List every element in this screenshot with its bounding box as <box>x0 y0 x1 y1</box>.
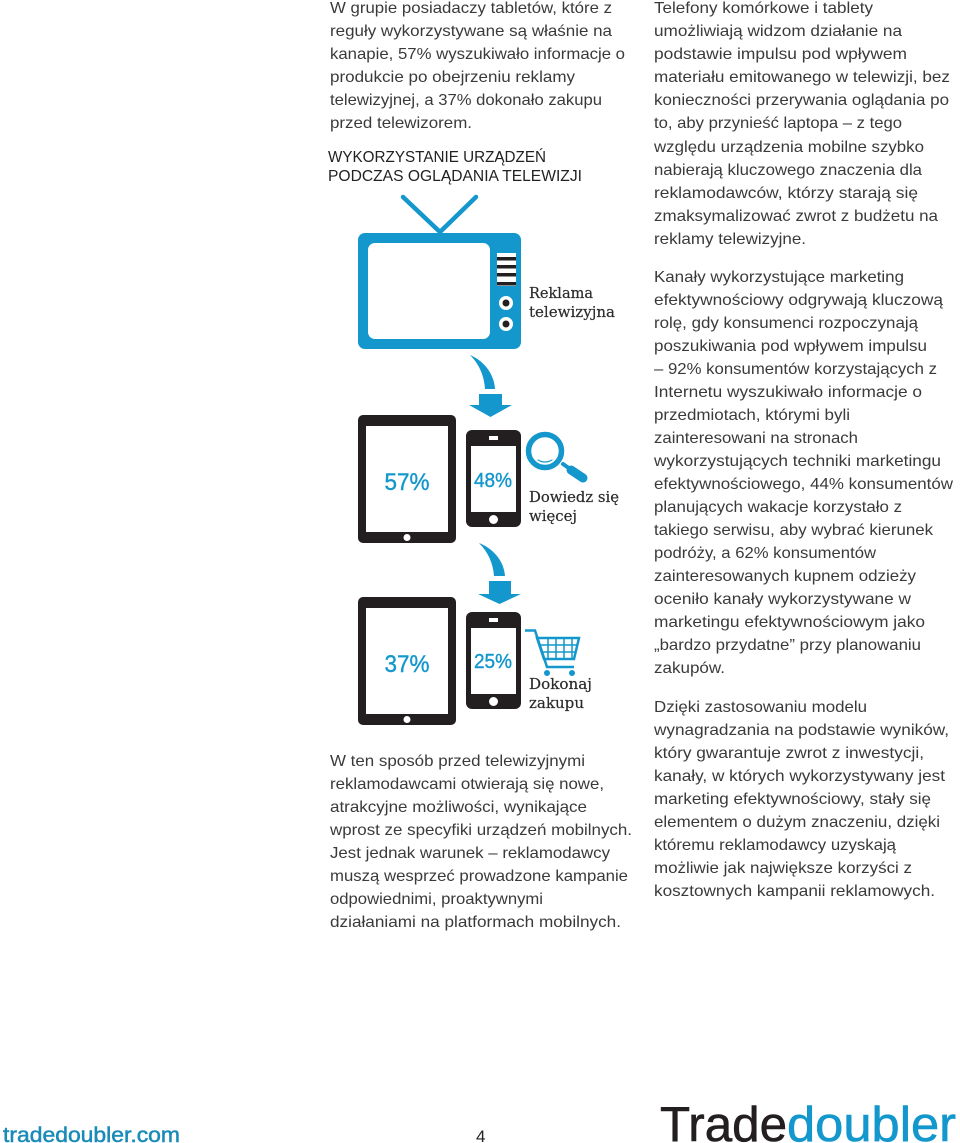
text block: tablet owners intro: W grupie posiadaczy tabletów, które z <box>330 0 612 17</box>
text block: performance marketing channels: oceniło kanały wykorzystywane w <box>654 591 911 608</box>
text block: opportunities for advertisers: reklamodawcami otwierają się nowe, <box>330 776 604 793</box>
text block: performance marketing channels: zainteresowani na stronach <box>654 430 858 447</box>
text block: performance marketing channels: podróży, a 62% konsumentów <box>654 545 876 562</box>
text block: tablet owners intro: produkcie po obejrzeniu reklamy <box>330 69 575 86</box>
text block: performance-based payment model: marketing efektywnościowy, stały się <box>654 791 931 808</box>
icon: shopping cart <box>525 630 579 676</box>
text block: performance marketing channels: rolę, gdy konsumenci rozpoczynają <box>654 315 918 332</box>
label: TV advertising <box>529 284 615 321</box>
text block: performance-based payment model: kosztownych kampanii reklamowych. <box>654 883 935 900</box>
icon: phone 25%: 25% <box>474 651 512 673</box>
icon: tablet 37% <box>358 597 456 725</box>
text block: performance marketing channels: Kanały wykorzystujące marketing <box>654 269 904 286</box>
text block: opportunities for advertisers: atrakcyjne możliwości, wynikające <box>330 799 587 816</box>
icon: television <box>358 197 521 349</box>
text block: phones and tablets impulse <box>653 0 950 248</box>
text block: performance marketing channels: zakupów. <box>654 660 725 677</box>
text block: performance marketing channels: poszukiwania pod wpływem impulsu <box>654 338 927 355</box>
arrow: research to purchase <box>478 543 521 604</box>
text block: performance marketing channels <box>653 269 953 677</box>
text block: opportunities for advertisers: W ten sposób przed telewizyjnymi <box>330 753 585 770</box>
heading: device usage while watching TV: PODCZAS OGLĄDANIA TELEWIZJI <box>328 168 582 185</box>
text block: phones and tablets impulse: zmaksymalizować zwrot z budżetu na <box>654 208 938 225</box>
text block: performance-based payment model: któremu reklamodawcy uzyskają <box>654 837 896 854</box>
text block: phones and tablets impulse: umożliwiają widzom działanie na <box>654 23 902 40</box>
text block: performance marketing channels: wykorzystujących techniki marketingu <box>653 453 941 470</box>
label: make a purchase <box>529 675 592 712</box>
text block: phones and tablets impulse: konieczności przerywania oglądania po <box>654 92 949 109</box>
text block: tablet owners intro: przed telewizorem. <box>330 115 472 132</box>
icon: phone 48% <box>466 430 521 527</box>
text block: performance marketing channels: planujących wakacje korzystało z <box>654 499 902 516</box>
icon: tablet 57%: 57% <box>384 469 430 496</box>
text block: performance marketing channels: zainteresowanych kupnem odzieży <box>654 568 916 585</box>
label: make a purchase: zakupu <box>529 694 584 712</box>
text block: performance marketing channels: takiego serwisu, aby wybrać kierunek <box>654 522 934 539</box>
text block: opportunities for advertisers: muszą wesprzeć prowadzone kampanie <box>330 868 628 885</box>
icon: tablet 37%: 37% <box>384 651 430 678</box>
text block: opportunities for advertisers <box>329 753 632 931</box>
text block: phones and tablets impulse: reklamodawców, którzy starają się <box>654 185 918 202</box>
text block: performance marketing channels: „bardzo przydatne” przy planowaniu <box>654 637 921 654</box>
label: TV advertising: telewizyjna <box>529 303 615 321</box>
icon: phone 48%: 48% <box>474 470 512 492</box>
text block: tablet owners intro <box>330 0 625 132</box>
text block: opportunities for advertisers: odpowiednimi, proaktywnymi <box>330 891 543 908</box>
text block: tablet owners intro: kanapie, 57% wyszukiwało informacje o <box>330 46 625 63</box>
text block: performance marketing channels: efektywnościowego, 44% konsumentów <box>654 476 953 493</box>
text block: opportunities for advertisers: wprost ze specyfiki urządzeń mobilnych. <box>329 822 632 839</box>
logo: Tradedoubler <box>660 1098 956 1143</box>
text block: phones and tablets impulse: materiału emitowanego w telewizji, bez <box>654 69 950 86</box>
text block: opportunities for advertisers: Jest jednak warunek – reklamodawcy <box>330 845 610 862</box>
text block: performance-based payment model <box>653 699 949 900</box>
label: learn more <box>529 488 619 525</box>
text block: performance marketing channels: – 92% konsumentów korzystających z <box>654 361 937 378</box>
text block: opportunities for advertisers: działaniami na platformach mobilnych. <box>330 914 621 931</box>
heading: device usage while watching TV <box>328 149 582 185</box>
text block: performance-based payment model: możliwie jak największe korzyści z <box>654 860 912 877</box>
text block: performance-based payment model: Dzięki zastosowaniu modelu <box>654 699 867 716</box>
text block: performance-based payment model: elementem o dużym znaczeniu, dzięki <box>654 814 940 831</box>
label: learn more: Dowiedz się <box>529 488 619 506</box>
text block: tablet owners intro: telewizyjnej, a 37% dokonało zakupu <box>330 92 602 109</box>
icon: tablet 57% <box>358 415 456 543</box>
text block: performance-based payment model: wynagradzania na podstawie wyników, <box>653 722 949 739</box>
label: make a purchase: Dokonaj <box>529 675 592 693</box>
text block: phones and tablets impulse: względu urządzenia mobilne szybko <box>653 139 924 156</box>
arrow: TV to devices <box>469 355 512 417</box>
text block: performance marketing channels: marketingu efektywnościowym jako <box>654 614 925 631</box>
text block: performance-based payment model: kanały, w których wykorzystywany jest <box>654 768 946 785</box>
icon: magnifying glass <box>528 434 583 478</box>
text block: tablet owners intro: reguły wykorzystywane są właśnie na <box>330 23 612 40</box>
text block: phones and tablets impulse: Telefony komórkowe i tablety <box>654 0 873 17</box>
text block: phones and tablets impulse: nabierają kluczowego znaczenia dla <box>654 162 922 179</box>
text block: phones and tablets impulse: to, aby przynieść laptopa – z tego <box>654 115 902 132</box>
text block: performance-based payment model: który gwarantuje zwrot z inwestycji, <box>654 745 924 762</box>
label: TV advertising: Reklama <box>529 284 593 302</box>
text block: performance marketing channels: przedmiotach, którymi byli <box>654 407 850 424</box>
text block: performance marketing channels: efektywnościowy odgrywają kluczową <box>654 292 943 309</box>
text block: phones and tablets impulse: podstawie impulsu pod wpływem <box>654 46 907 63</box>
icon: phone 25% <box>466 612 521 709</box>
text block: phones and tablets impulse: reklamy telewizyjne. <box>654 231 806 248</box>
label: learn more: więcej <box>529 507 577 525</box>
text block: performance marketing channels: Internetu wyszukiwało informacje o <box>654 384 922 401</box>
heading: device usage while watching TV: WYKORZYSTANIE URZĄDZEŃ <box>328 149 546 166</box>
